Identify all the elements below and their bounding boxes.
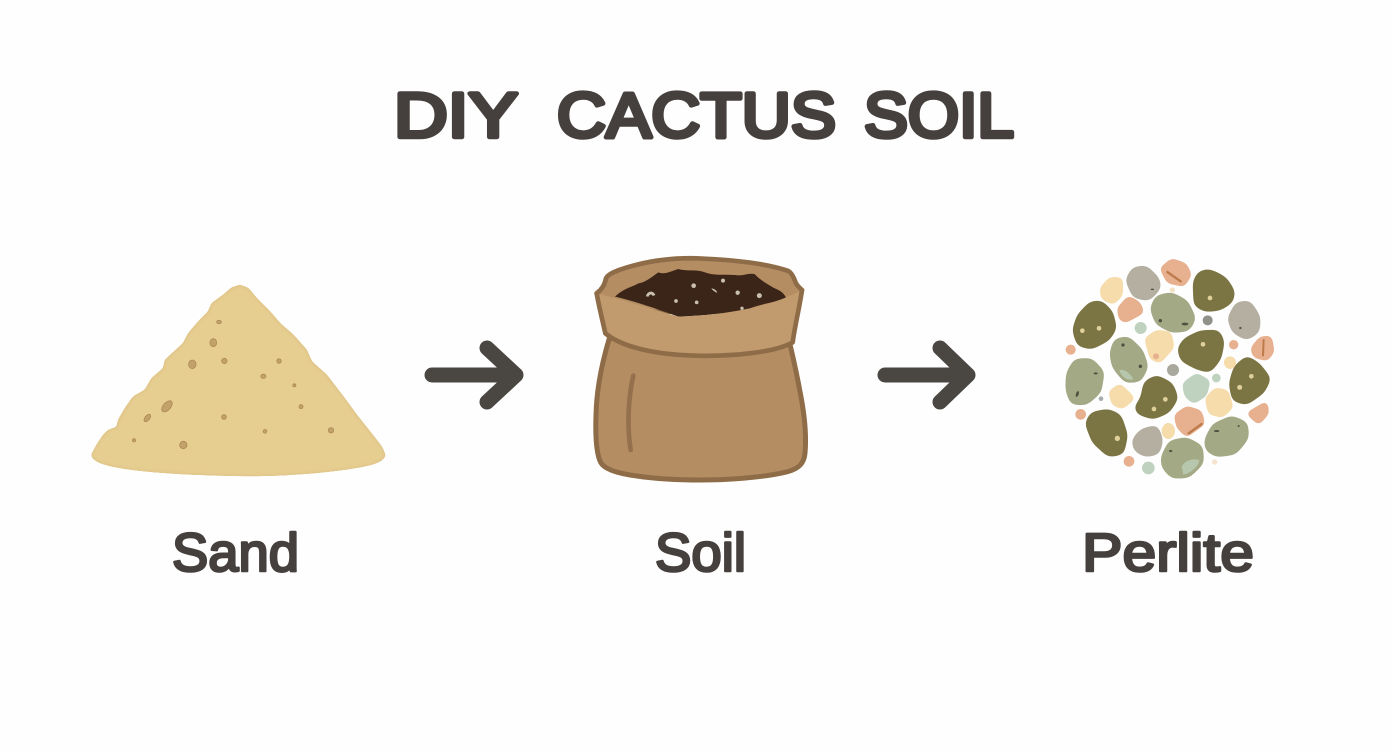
bag body bbox=[596, 338, 806, 480]
sand specks bbox=[132, 320, 334, 449]
label: Soil: Soil bbox=[655, 523, 746, 583]
arrow: soil to perlite bbox=[885, 348, 968, 402]
icon: soil bag bbox=[596, 258, 806, 480]
icon: perlite pebbles bbox=[1066, 259, 1274, 478]
sage pebbles bbox=[1066, 293, 1248, 478]
title bbox=[394, 81, 1014, 151]
cream seeds on olive pebbles bbox=[1080, 296, 1254, 441]
dark olive pebbles bbox=[1073, 269, 1271, 457]
grey pebbles bbox=[1126, 266, 1260, 457]
peach stripes bbox=[1167, 272, 1264, 433]
pale highlights on sage pebbles bbox=[1119, 370, 1199, 475]
bag crease bbox=[629, 376, 633, 450]
bag folded collar bbox=[597, 290, 802, 356]
mint pebbles bbox=[1135, 322, 1221, 474]
small grey dots bbox=[1203, 315, 1213, 325]
soil surface bbox=[615, 269, 786, 317]
icon: sand pile bbox=[91, 285, 385, 476]
title: DIY bbox=[394, 81, 518, 151]
title: CACTUS bbox=[557, 81, 836, 151]
soil flecks bbox=[646, 279, 762, 310]
arrow: sand to soil bbox=[432, 348, 516, 402]
back rim of the bag bbox=[597, 258, 802, 312]
cream pebbles bbox=[1100, 278, 1236, 439]
dark marks on sage pebbles bbox=[1075, 289, 1241, 452]
label: Sand: Sand bbox=[172, 523, 299, 583]
label: Perlite: Perlite bbox=[1082, 523, 1254, 583]
small peach dots bbox=[1066, 340, 1238, 467]
title: SOIL bbox=[864, 81, 1014, 151]
peach pebbles bbox=[1118, 259, 1274, 437]
